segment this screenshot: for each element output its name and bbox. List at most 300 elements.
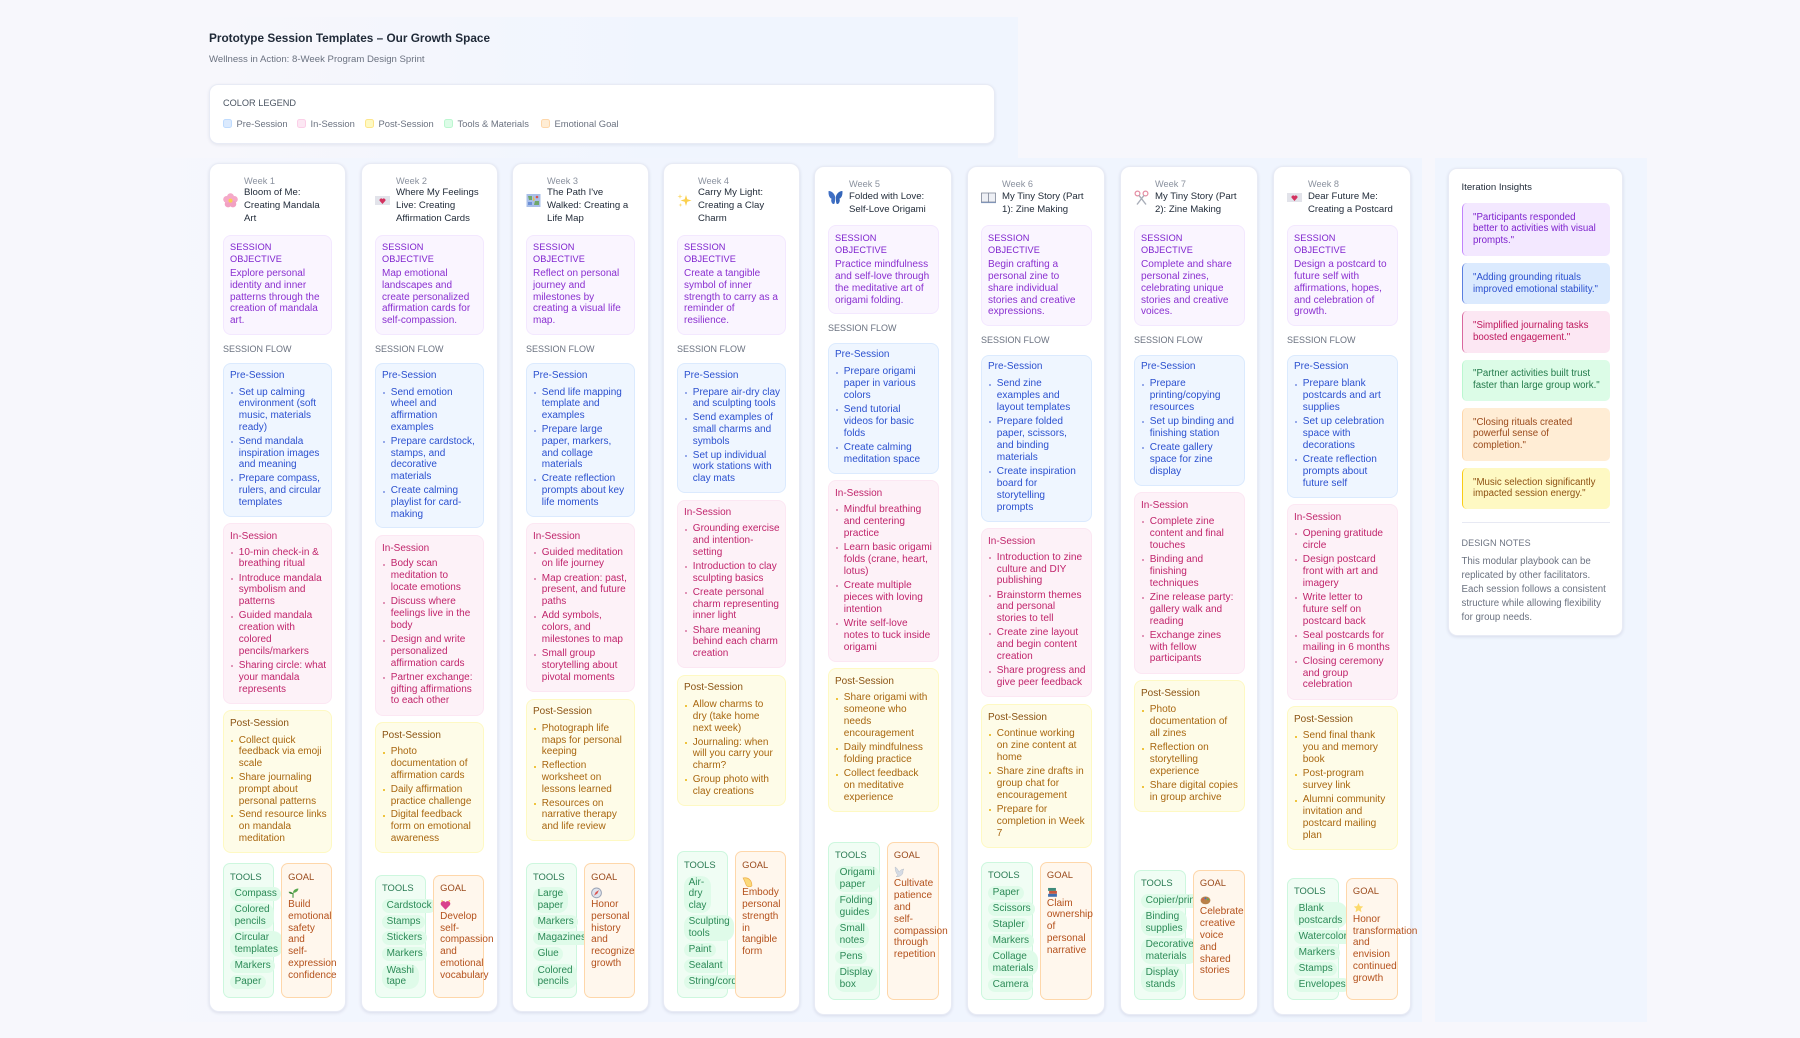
emotional goal: Build: [288, 899, 310, 910]
pre-session: Create gallery: [1150, 442, 1213, 453]
pre-session: layout templates: [997, 402, 1070, 413]
panel: week 5: [814, 166, 952, 1015]
session objective: share individual: [988, 283, 1058, 294]
in-session: [828, 480, 938, 662]
in-session: origami: [844, 642, 877, 652]
pre-session: [223, 363, 332, 517]
session objective: [526, 235, 635, 335]
session objective: and self-love through: [835, 271, 929, 282]
panel: week 7: [1120, 166, 1258, 1015]
pre-session: storytelling: [997, 490, 1045, 501]
week 1 header: Creating Mandala: [244, 200, 320, 211]
week 6 header: My Tiny Story (Part: [1002, 191, 1084, 202]
in-session: Small group: [542, 648, 595, 659]
subtitle: Wellness in Action: 8-Week Program Design Sprint: [209, 54, 425, 65]
tools: Folding: [840, 895, 873, 906]
post-session: worksheet on: [542, 772, 601, 783]
post-session: plan: [1303, 830, 1322, 841]
in-session: Map creation: past,: [542, 573, 627, 584]
pre-session: environment (soft: [239, 398, 316, 409]
in-session: [223, 523, 332, 704]
pre-session: examples: [391, 422, 434, 433]
emotional goal: and: [591, 934, 608, 945]
insight: grounding rituals: "Adding grounding rituals: [1473, 272, 1581, 283]
tools: Sealant: [689, 960, 723, 971]
in-session: circle: [1303, 540, 1326, 551]
tools and goal: [1134, 870, 1245, 1000]
tools: supplies: [1146, 923, 1183, 934]
tools: TOOLS: [988, 869, 1020, 880]
session objective: landscapes and: [382, 280, 452, 291]
in-session: In-Session: [684, 507, 731, 518]
legend item: in-session: In-Session: [310, 118, 355, 128]
tools: notes: [840, 935, 864, 946]
in-session: [375, 535, 484, 716]
session objective: voices.: [1141, 306, 1172, 317]
post-session: Post-program: [1303, 768, 1364, 779]
icon: glowing star: [1354, 903, 1363, 912]
in-session: mailing in 6 months: [1303, 642, 1390, 652]
in-session: represents: [239, 684, 286, 695]
insight: visual prompts: [1462, 203, 1610, 256]
in-session: Create zine layout: [997, 627, 1078, 638]
pre-session: Create calming: [844, 442, 912, 453]
post-session: encouragement: [997, 790, 1067, 801]
in-session: with fellow: [1150, 642, 1196, 652]
emotional goal: in: [742, 923, 750, 934]
panel: week 8: [1273, 166, 1411, 1015]
legend heading: COLOR LEGEND: [223, 98, 296, 108]
tools: paper: [538, 900, 563, 911]
icon: compass: [591, 888, 602, 898]
emotional goal: [735, 851, 786, 998]
post-session: invitation and: [1303, 806, 1362, 817]
week 3 header: Life Map: [547, 213, 584, 224]
in-session: In-Session: [533, 531, 580, 542]
in-session: culture and DIY: [997, 564, 1066, 574]
icon: palette: [1200, 896, 1210, 904]
in-session: Add symbols,: [542, 610, 602, 621]
in-session: future self on: [1303, 604, 1361, 615]
session objective: personal zines,: [1141, 271, 1209, 282]
in-session: touches: [1150, 540, 1185, 551]
insight: journaling: "Simplified journaling tasks: [1473, 320, 1588, 331]
design notes heading: DESIGN NOTES: [1462, 538, 1531, 548]
emotional goal: and: [440, 946, 457, 957]
tools: Markers: [387, 948, 423, 959]
post-session: Post-Session: [1141, 688, 1200, 699]
pre-session: prompts about key: [542, 485, 624, 496]
week 8 header: Week 8: [1308, 179, 1339, 189]
tools: stands: [1146, 979, 1175, 990]
tools: TOOLS: [382, 882, 414, 893]
in-session: content and final: [1150, 528, 1224, 539]
emotional goal: Embody: [742, 887, 779, 898]
pre-session: Send zine: [997, 378, 1042, 389]
emotional goal: personal: [1047, 933, 1086, 944]
in-session: Opening gratitude: [1303, 528, 1383, 539]
emotional goal: self-: [440, 923, 459, 934]
pre-session: symbols: [693, 436, 729, 447]
post-session: awareness: [391, 833, 439, 844]
post-session: Reflection on: [1150, 742, 1209, 753]
in-session: inner light: [693, 610, 736, 621]
pre-session: Prepare folded: [997, 416, 1063, 427]
emotional goal: history: [591, 923, 621, 934]
emotional goal: vocabulary: [440, 970, 489, 981]
pre-session: videos for basic: [844, 416, 914, 427]
emotional goal: creative: [1200, 918, 1235, 929]
session objective: stories and creative: [988, 295, 1076, 306]
session objective: Explore personal: [230, 268, 305, 279]
pre-session: Create reflection: [1303, 454, 1377, 465]
post-session: prompt about: [239, 784, 298, 795]
session objective: creation of mandala: [230, 303, 318, 314]
pre-session: Prepare cardstock,: [391, 436, 475, 447]
session objective: personal zine to: [988, 271, 1059, 282]
in-session: celebration: [1303, 679, 1352, 690]
pre-session: Pre-Session: [533, 370, 587, 381]
session objective: [1287, 225, 1398, 326]
tools: Display: [1146, 967, 1179, 978]
pre-session: [677, 363, 786, 493]
tools: TOOLS: [1141, 877, 1173, 888]
post-session: keeping: [542, 746, 577, 757]
in-session: In-Session: [230, 531, 277, 542]
post-session: [1134, 680, 1244, 812]
emotional goal: personal: [591, 911, 630, 922]
session objective: SESSION: [382, 242, 424, 252]
tools: Pens: [840, 951, 863, 962]
design notes text: replicated by other facilitators.: [1462, 570, 1590, 581]
week 4 header: Charm: [698, 213, 727, 224]
post-session: Share digital copies: [1150, 780, 1238, 791]
pre-session: wheel and: [391, 398, 436, 409]
pre-session: Pre-Session: [1294, 361, 1348, 372]
post-session: lessons learned: [542, 784, 612, 795]
week 1 header: Art: [244, 213, 256, 224]
post-session: Send resource links: [239, 809, 327, 820]
emotional goal: [584, 863, 635, 998]
tools: pencils: [538, 976, 569, 987]
tools: Paint: [689, 944, 711, 955]
session objective: [375, 235, 484, 335]
panel: week 4: [663, 163, 800, 1012]
emotional goal: strength: [742, 911, 778, 922]
tools: TOOLS: [533, 871, 565, 882]
session objective: journey and: [533, 280, 585, 291]
in-session: creation: [997, 651, 1033, 662]
week 6 header: 1): Zine Making: [1002, 204, 1068, 215]
tools and goal: [677, 851, 786, 998]
pre-session: and sculpting tools: [693, 398, 776, 409]
tools: Air-: [689, 877, 704, 888]
emotional goal: Develop: [440, 911, 477, 922]
in-session: gifting affirmations: [391, 684, 472, 695]
in-session: pieces with loving: [844, 592, 923, 603]
icon: dove: [894, 866, 904, 877]
week 7 header: My Tiny Story (Part: [1155, 191, 1237, 202]
emotional goal: recognize: [591, 946, 635, 957]
emotional goal: [433, 875, 484, 998]
pre-session: Send tutorial: [844, 404, 900, 415]
in-session: charm representing: [693, 599, 779, 610]
in-session: Sharing circle: what: [239, 660, 326, 671]
in-session: locate emotions: [391, 582, 461, 593]
in-session: Design postcard: [1303, 554, 1376, 565]
emotional goal: and: [1353, 937, 1370, 948]
post-session: needs: [844, 716, 871, 727]
post-session: storytelling: [1150, 754, 1198, 765]
pre-session: postcards and art: [1303, 390, 1381, 401]
week 7 header: 2): Zine Making: [1155, 204, 1221, 215]
panel: week 1: [209, 163, 346, 1012]
pre-session: Create calming: [391, 485, 458, 496]
in-session: Share progress and: [997, 665, 1085, 676]
tools: Paper: [235, 976, 261, 987]
in-session: Share meaning: [693, 625, 761, 636]
in-session: Create multiple: [844, 580, 912, 591]
week 8 header: [1287, 179, 1393, 215]
in-session: Zine release party:: [1150, 592, 1233, 603]
post-session: Allow charms to: [693, 699, 763, 710]
session objective: OBJECTIVE: [382, 254, 434, 264]
pre-session: Set up individual: [693, 450, 766, 461]
post-session: Alumni community: [1303, 794, 1385, 805]
tools: Circular: [235, 932, 269, 943]
emotional goal: GOAL: [1047, 869, 1073, 880]
in-session: Introduction to zine: [997, 552, 1082, 563]
insights heading: Iteration Insights: [1462, 182, 1532, 193]
emotional goal: growth: [591, 958, 621, 969]
in-session: feelings live in the: [391, 608, 470, 619]
session flow heading: SESSION FLOW: [375, 344, 444, 354]
week 4 header: [678, 176, 764, 224]
emotional goal: Honor: [1353, 914, 1380, 925]
pre-session: Pre-Session: [988, 361, 1042, 372]
pre-session: space for zine: [1150, 454, 1213, 465]
pre-session: Set up celebration: [1303, 416, 1384, 427]
legend item: tools and materials: Tools & Materials: [458, 118, 529, 128]
tools: Compass: [235, 888, 277, 899]
tools: Collage: [993, 951, 1027, 962]
pre-session: inspiration images: [239, 448, 319, 459]
week 2 header: Affirmation Cards: [396, 213, 470, 224]
post-session: form on emotional: [391, 821, 471, 832]
tools and goal: [375, 875, 494, 998]
session objective: art.: [230, 315, 244, 326]
pre-session: Pre-Session: [835, 349, 889, 360]
tools: [828, 842, 880, 1000]
pre-session: printing/copying: [1150, 390, 1220, 401]
emotional goal: ownership: [1047, 909, 1093, 920]
post-session: Post-Session: [988, 712, 1047, 722]
icon: love letter: [1287, 193, 1302, 202]
pre-session: resources: [1150, 402, 1194, 413]
insight: visual prompts: "Participants responded: [1473, 212, 1576, 223]
in-session: In-Session: [988, 536, 1035, 547]
week 2 header: Live: Creating: [396, 200, 455, 211]
session objective: SESSION: [1294, 233, 1336, 243]
in-session: Discuss where: [391, 596, 456, 607]
insight: closing rituals: [1462, 408, 1610, 461]
tools: [1287, 878, 1339, 1000]
insight: music: "Music selection significantly: [1473, 477, 1595, 488]
emotional goal: GOAL: [440, 882, 466, 893]
tools: [526, 863, 577, 998]
post-session: group chat for: [997, 778, 1059, 789]
icon: flower: [223, 193, 238, 208]
emotional goal: [1193, 870, 1245, 1000]
session objective: Reflect on personal: [533, 268, 619, 279]
emotional goal: transformation: [1353, 926, 1417, 937]
post-session: completion in Week: [997, 816, 1085, 827]
in-session: pivotal moments: [542, 672, 615, 683]
tools: [375, 875, 426, 998]
emotional goal: [281, 863, 332, 998]
tools: Stamps: [387, 916, 420, 927]
post-session: Post-Session: [1294, 714, 1353, 725]
session objective: Design a postcard to: [1294, 259, 1387, 270]
post-session: postcard mailing: [1303, 818, 1376, 829]
pre-session: meditation space: [844, 454, 920, 465]
pre-session: display: [1150, 466, 1181, 477]
emotional goal: stories: [1200, 965, 1230, 976]
tools: materials: [993, 963, 1034, 974]
session objective: [223, 235, 332, 335]
insight: music: [1462, 468, 1610, 509]
session objective: Map emotional: [382, 268, 448, 279]
in-session: 10-min check-in &: [239, 547, 319, 558]
tools: TOOLS: [835, 849, 867, 860]
post-session: documentation of: [1150, 716, 1227, 727]
in-session: creation: [693, 648, 728, 659]
post-session: [828, 668, 938, 812]
pre-session: [1287, 355, 1398, 498]
pre-session: Pre-Session: [684, 370, 738, 381]
in-session: notes to tuck inside: [844, 630, 930, 641]
emotional goal: GOAL: [1200, 877, 1226, 888]
session objective: SESSION: [988, 233, 1030, 243]
pre-session: ready): [239, 422, 267, 433]
session flow heading: SESSION FLOW: [1287, 335, 1356, 345]
in-session: [526, 523, 635, 692]
emotional goal: GOAL: [288, 871, 314, 882]
in-session: sculpting basics: [693, 573, 763, 584]
pre-session: Pre-Session: [1141, 361, 1195, 372]
pre-session: Prepare blank: [1303, 378, 1366, 389]
post-session: Daily affirmation: [391, 784, 462, 795]
week 4 header: Week 4: [698, 176, 729, 186]
pre-session: decorations: [1303, 440, 1355, 451]
insight: journaling: boosted engagement.": [1473, 332, 1570, 343]
session objective: reminder of: [684, 303, 735, 314]
tools: dry: [689, 888, 702, 899]
pre-session: colors: [844, 390, 871, 401]
legend item: emotional goal: Emotional Goal: [554, 118, 619, 128]
week 6 header: [981, 179, 1084, 215]
pre-session: clay mats: [693, 473, 735, 484]
panel: iteration insights: [1448, 168, 1623, 636]
week 5 header: Self-Love Origami: [849, 204, 926, 215]
post-session: Photo: [391, 746, 417, 757]
tools: Watercolor: [1299, 931, 1347, 942]
post-session: documentation of: [391, 758, 468, 769]
pre-session: Send examples of: [693, 412, 773, 423]
post-session: Photo: [1150, 704, 1176, 715]
pre-session: [1134, 355, 1244, 486]
tools: postcards: [1299, 915, 1342, 926]
in-session: [1287, 504, 1398, 700]
pre-session: making: [391, 509, 423, 520]
session objective: the meditative art of: [835, 283, 924, 294]
week 2 header: [375, 176, 479, 224]
emotional goal: patience: [894, 890, 932, 901]
pre-session: Prepare origami: [844, 366, 916, 377]
pre-session: paper in various: [844, 378, 916, 389]
in-session: Exchange zines: [1150, 630, 1221, 641]
insight: grounding rituals: [1462, 263, 1610, 304]
in-session: setting: [693, 547, 722, 558]
emotional goal: form: [742, 946, 762, 957]
insight: partner activities: "Partner activities built trust: [1473, 368, 1590, 379]
week 8 header: Creating a Postcard: [1308, 204, 1393, 215]
tools: Washi: [387, 965, 414, 976]
post-session: experience: [1150, 766, 1199, 777]
post-session: Post-Session: [230, 718, 289, 729]
tools: Copier/printer: [1146, 895, 1207, 906]
insight: journaling: [1462, 311, 1610, 353]
pre-session: Prepare compass,: [239, 473, 320, 484]
pre-session: Set up calming: [239, 387, 305, 398]
pre-session: decorative: [391, 459, 437, 470]
post-session: Resources on: [542, 798, 604, 809]
session objective: [828, 225, 938, 314]
panel: week 6: [967, 166, 1105, 1015]
tools: box: [840, 979, 856, 990]
pre-session: playlist for card-: [391, 497, 461, 508]
in-session: Write self-love: [844, 618, 908, 629]
tools: TOOLS: [230, 871, 262, 882]
session objective: future self with: [1294, 271, 1359, 282]
post-session: Continue working: [997, 728, 1075, 739]
insight: closing rituals: powerful sense of: [1473, 428, 1549, 439]
in-session: In-Session: [1294, 512, 1341, 523]
tools: Stamps: [1299, 963, 1333, 974]
post-session: and life review: [542, 821, 606, 832]
session objective: resilience.: [684, 315, 729, 326]
session objective: celebrating unique: [1141, 283, 1224, 294]
session objective: Begin crafting a: [988, 259, 1058, 270]
post-session: Collect feedback: [844, 768, 918, 779]
post-session: experience: [844, 792, 893, 803]
pre-session: Prepare large: [542, 424, 602, 435]
tools: guides: [840, 907, 869, 918]
design notes text: for group needs.: [1462, 612, 1532, 623]
post-session: Share origami with: [844, 692, 927, 703]
session objective: symbol of inner: [684, 280, 752, 291]
post-session: personal patterns: [239, 796, 316, 807]
post-session: Journaling: when: [693, 737, 768, 748]
pre-session: and collage: [542, 448, 593, 459]
in-session: Write letter to: [1303, 592, 1363, 603]
post-session: Collect quick: [239, 735, 296, 746]
tools: Decorative: [1146, 939, 1194, 950]
tools: Display: [840, 967, 873, 978]
week 1 header: Bloom of Me:: [244, 187, 301, 198]
icon: love letter: [375, 196, 390, 205]
session objective: growth.: [1294, 306, 1327, 317]
